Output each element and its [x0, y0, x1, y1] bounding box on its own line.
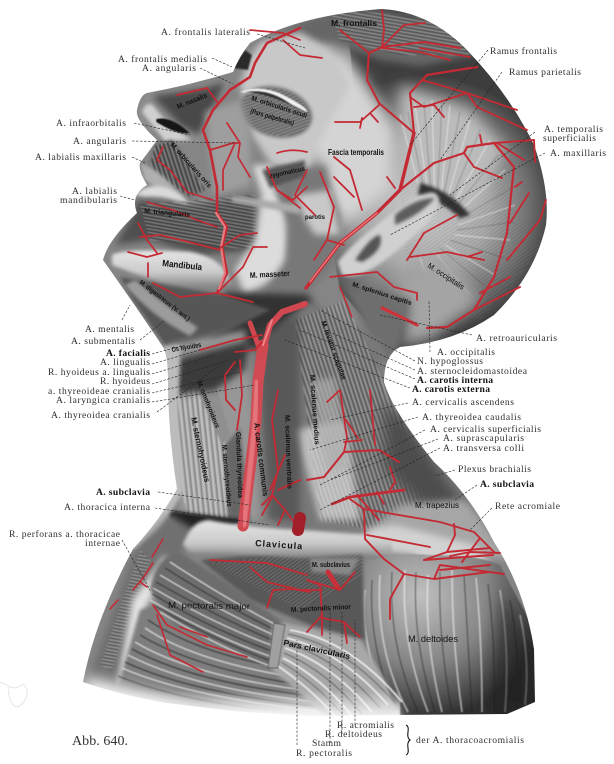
- A. retroauricularis and A. occipitalis: [314, 157, 484, 325]
- Fascia temporalis: Fascia temporalis: [328, 148, 384, 157]
- M. zygomaticus: zygomaticus: [269, 166, 306, 180]
- M. pectoralis major: sternal part: [83, 606, 410, 716]
- label: A. mentalis: [85, 324, 134, 335]
- label: A. carotis externa: [412, 384, 490, 395]
- M. deltoides: M. deltoides: [408, 634, 459, 644]
- label: A. frontalis lateralis: [161, 27, 250, 38]
- floor of mouth and hyoid muscles: [120, 277, 270, 345]
- pars clavicularis tendon: [268, 623, 402, 720]
- label: R. hyoideus a. lingualis: [48, 367, 150, 378]
- scalp musculature: [335, 9, 547, 350]
- M. splenius capitis: M. splenius capitis: [351, 281, 413, 307]
- Os hyoides: Os hyoides: [171, 342, 202, 354]
- light acromion: [362, 522, 493, 562]
- Ramus parietalis: [400, 135, 546, 328]
- right labels: [412, 46, 606, 512]
- forehead and brow: [240, 32, 350, 170]
- chest wall vessels: [110, 539, 247, 672]
- A. facialis and branches: [128, 28, 322, 302]
- label: Ramus frontalis: [490, 46, 557, 57]
- label: Plexus brachialis: [458, 464, 531, 475]
- label: A. submentalis: [71, 336, 135, 347]
- A. temporalis superficialis trunk: [306, 67, 477, 288]
- occipital belly: [395, 255, 480, 345]
- label: A. labialis: [72, 186, 117, 197]
- temporalis fan: [400, 85, 515, 315]
- M. subclavius: M. subclavius: [312, 562, 350, 569]
- M. masseter: M. masseter: [250, 269, 290, 280]
- A. carotis communis label: A. carotis communis: [252, 422, 270, 497]
- label: A. temporalis: [544, 124, 603, 135]
- M. sternothyreoideus: M. sternothyreoideus: [220, 445, 232, 507]
- M. pectoralis minor: M. pectoralis minor: [291, 604, 351, 614]
- nose: [139, 81, 224, 143]
- label: A. thyreoidea caudalis: [422, 412, 521, 423]
- dark shadow under jaw: [205, 292, 320, 350]
- M. levator scapulae: M. levator scapulae: [319, 320, 347, 381]
- arteries: [110, 10, 546, 672]
- label: A. thoracica interna: [64, 502, 151, 513]
- muscle and structure names: [138, 19, 466, 661]
- paper stain mark: [0, 682, 27, 707]
- A. subclavia branches and Rete acromiale: [332, 467, 504, 619]
- label: A. angularis: [142, 63, 196, 74]
- M. orbicularis oculi: [240, 84, 314, 140]
- label: internae: [85, 538, 120, 549]
- muscles around the upper lip: [150, 100, 250, 197]
- A. carotis communis: [243, 304, 305, 526]
- label: a. thyreoideae cranialis: [48, 386, 150, 397]
- Glandula thyreoidea: Glandula thyreoidea: [234, 432, 243, 498]
- base silhouette: [83, 16, 528, 700]
- M. orbicularis oculi: M. orbicularis oculi: [250, 95, 308, 120]
- Pars clavicularis: Pars clavicularis: [283, 638, 352, 661]
- label: R. acromialis: [337, 720, 394, 731]
- label: A. labialis maxillaris: [35, 152, 126, 163]
- label: Stamm: [312, 738, 342, 749]
- neck: scalene and lateral muscles: [255, 300, 470, 535]
- label: A. facialis: [106, 348, 150, 359]
- Clavicula: Clavicula: [255, 538, 303, 551]
- hair of the eyebrow: [232, 50, 252, 70]
- M. orbicularis oris: M. orbicularis oris: [169, 142, 213, 190]
- label: A. suprascapularis: [443, 433, 524, 444]
- subclavian stump and clavicular region vessels: [210, 518, 360, 643]
- figure number: Abb. 640.: [72, 734, 128, 749]
- M. occipitalis: M. occipitalis: [426, 261, 466, 292]
- Mandibula: Mandibula: [162, 258, 204, 272]
- label: A. angularis: [73, 136, 126, 147]
- clavicle: [183, 520, 392, 558]
- fascia temporalis: [312, 40, 400, 229]
- leader lines: [120, 34, 545, 745]
- label: A. infraorbitalis: [56, 118, 126, 129]
- label: mandibularis: [60, 195, 117, 206]
- label: A. thyreoidea cranialis: [51, 410, 150, 421]
- label: A. laryngica cranialis: [56, 395, 150, 406]
- label: R. deltoideus: [325, 729, 382, 740]
- mandibula: [112, 251, 232, 287]
- label: A. cervicalis ascendens: [412, 397, 514, 408]
- label: R. hyoideus: [100, 376, 150, 387]
- M. scalenus ventralis: M. scalenus ventralis: [283, 415, 293, 489]
- label: der A. thoracoacromialis: [416, 735, 524, 746]
- label: A. cervicalis superficialis: [430, 424, 541, 435]
- lips: [135, 163, 188, 205]
- left labels: [9, 27, 250, 749]
- label: superficialis: [543, 133, 596, 144]
- deltoid: [363, 554, 535, 715]
- bottom labels: der A. thoracoacromialis: [296, 720, 524, 759]
- label: N. hypoglossus: [417, 356, 483, 367]
- ear: [338, 192, 439, 276]
- M. pectoralis major: clavicular part: [150, 552, 285, 668]
- dark crescent above ear: [418, 183, 470, 218]
- label: A. retroauricularis: [476, 333, 557, 344]
- figure: dissected head, neck and shoulder: [80, 0, 560, 735]
- Pars palpebralis: (Pars palpebralis): [249, 108, 295, 127]
- M. scalenus medius: M. scalenus medius: [308, 375, 320, 445]
- label: Ramus parietalis: [509, 67, 581, 78]
- M. trapezius: M. trapezius: [415, 501, 459, 510]
- M. digastricus: M. digastricus (V. ant.): [138, 279, 191, 323]
- label: A. subclavia: [480, 479, 534, 490]
- brace: [406, 725, 410, 755]
- M. trapezius: [370, 500, 510, 560]
- label: A. transversa colli: [443, 443, 524, 454]
- neck edge skin strip: [132, 344, 183, 550]
- mouth and chin muscles: [115, 195, 258, 255]
- label: Rete acromiale: [495, 501, 560, 512]
- M. frontalis: M. frontalis: [331, 19, 378, 28]
- neck branches: [200, 335, 399, 530]
- M. omohyoideus: M. omohyoideus: [195, 380, 220, 429]
- label: A. subclavia: [96, 487, 150, 498]
- M. nasalis: M. nasalis: [176, 92, 209, 111]
- M. sternohyoideus: M. sternohyoideus: [189, 417, 212, 483]
- clavicle shadow under bone: [168, 509, 250, 532]
- M. masseter and parotis: [232, 160, 340, 300]
- Ramus frontalis: [335, 10, 527, 133]
- parotis: parotis: [305, 214, 325, 221]
- thoracic skin fold: [88, 515, 195, 690]
- M. triangularis: M. triangularis: [144, 208, 190, 219]
- label: A. frontalis medialis: [118, 54, 207, 65]
- M. splenius and upper nape: [345, 285, 410, 365]
- deep chest cavity: [200, 545, 365, 640]
- ramus and cheek highlight: [235, 165, 290, 295]
- label: R. pectoralis: [296, 748, 352, 759]
- soft fade at lower chest edge: [141, 692, 401, 716]
- M. pectoralis major: M. pectoralis major: [168, 600, 250, 611]
- label: A. maxillaris: [550, 148, 606, 159]
- neck: strap muscles: [168, 330, 260, 520]
- label: A. carotis interna: [417, 375, 493, 386]
- label: R. perforans a. thoracicae: [9, 529, 120, 540]
- M. frontalis region: [255, 5, 475, 66]
- label: A. lingualis: [100, 357, 150, 368]
- label: A. occipitalis: [437, 347, 495, 358]
- label: A. sternocleidomastoidea: [417, 366, 528, 377]
